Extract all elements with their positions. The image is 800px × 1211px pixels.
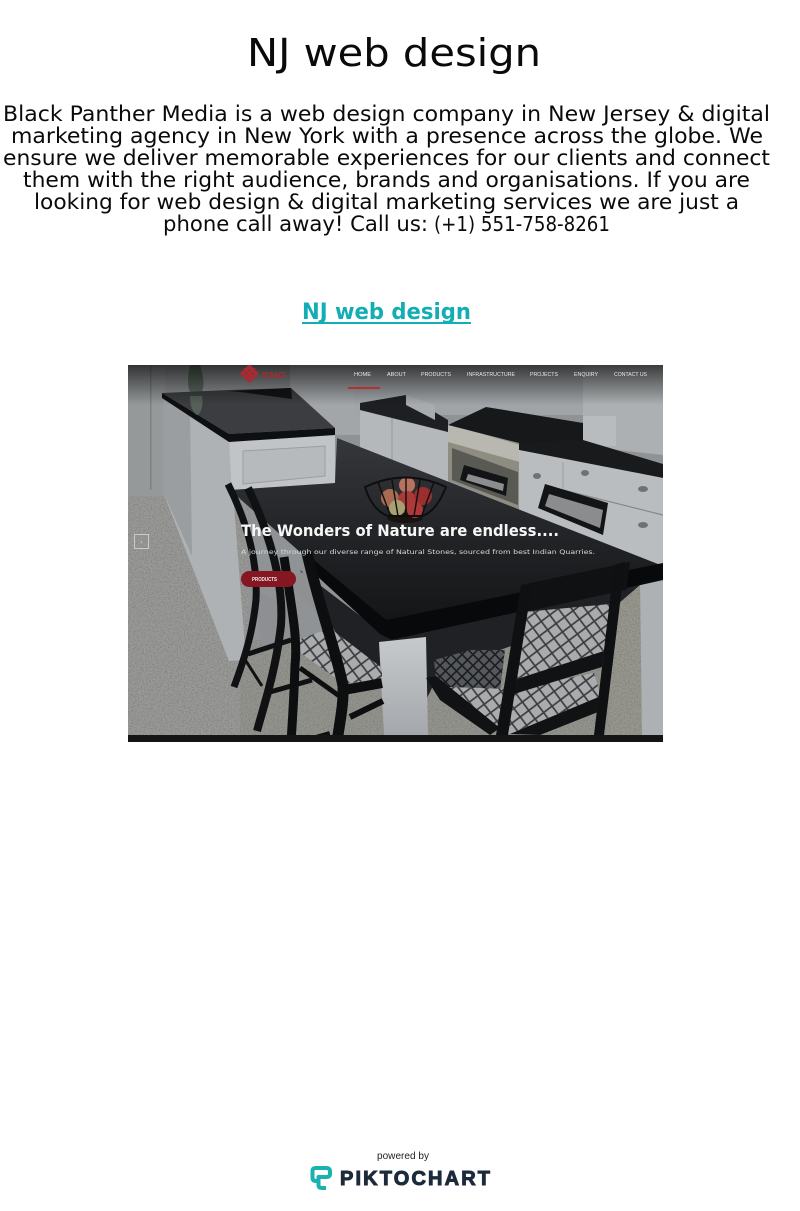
products button: PRODUCTS: [252, 577, 278, 583]
photo: background chairs: [460, 465, 608, 535]
photo: dining table: [230, 438, 663, 640]
site navigation: [354, 372, 647, 377]
site navigation: CONTACT US: [614, 372, 648, 378]
intro paragraph: phone call away! Call us:: [163, 212, 428, 236]
hero subheadline: A journey through our diverse range of Natural Stones, sourced from best Indian Quarries.: [241, 549, 595, 556]
website screenshot: [128, 365, 663, 743]
site navigation: HOME: [354, 372, 372, 378]
photo: table leg: [379, 637, 428, 735]
intro paragraph: Black Panther Media is a web design company in New Jersey & digital: [3, 102, 770, 126]
slider previous arrow: [134, 534, 148, 548]
top shade: [128, 365, 663, 405]
intro paragraph: marketing agency in New York with a presence across the globe. We: [11, 124, 763, 148]
photo: back cabinets: [360, 395, 663, 570]
title: NJ web design: [247, 31, 541, 75]
intro paragraph: them with the right audience, brands and organisations. If you are: [23, 168, 750, 192]
photo: right-hand table leg: [640, 572, 663, 735]
wordmark: PIKTOCHART: [340, 1168, 490, 1190]
site logo: [240, 365, 287, 383]
intro paragraph: ensure we deliver memorable experiences for our clients and connect: [3, 146, 770, 170]
photo: kitchen island: [162, 388, 335, 661]
intro paragraph: looking for web design & digital marketing services we are just a: [34, 190, 739, 214]
photo: front chair: [426, 562, 630, 735]
site navigation: PRODUCTS: [421, 372, 452, 378]
photo: floor: [128, 496, 663, 735]
site navigation: INFRASTRUCTURE: [467, 372, 516, 378]
photo: left chairs: [228, 484, 383, 743]
intro paragraph: [3, 102, 770, 236]
site navigation: PROJECTS: [530, 372, 559, 378]
site navigation: ABOUT: [387, 372, 406, 378]
bottom bar: [128, 735, 663, 742]
photo: wall and background: [128, 365, 663, 640]
icon: Piktochart P mark: [312, 1168, 330, 1188]
site logo: SNG: [262, 370, 287, 380]
Piktochart logo: [312, 1168, 490, 1190]
photo: fruit bowl: [365, 477, 446, 523]
site navigation: ENQUIRY: [574, 372, 599, 378]
hero headline: The Wonders of Nature are endless....: [241, 521, 559, 540]
powered by: powered by: [377, 1150, 430, 1162]
slider previous arrow: ‹: [140, 539, 143, 546]
link heading: NJ web design: [302, 300, 471, 325]
photo: under-table shadow: [300, 570, 640, 700]
products button: [241, 571, 296, 587]
intro paragraph: (+1) 551-758-8261: [434, 212, 610, 236]
active nav underline: [348, 387, 380, 389]
